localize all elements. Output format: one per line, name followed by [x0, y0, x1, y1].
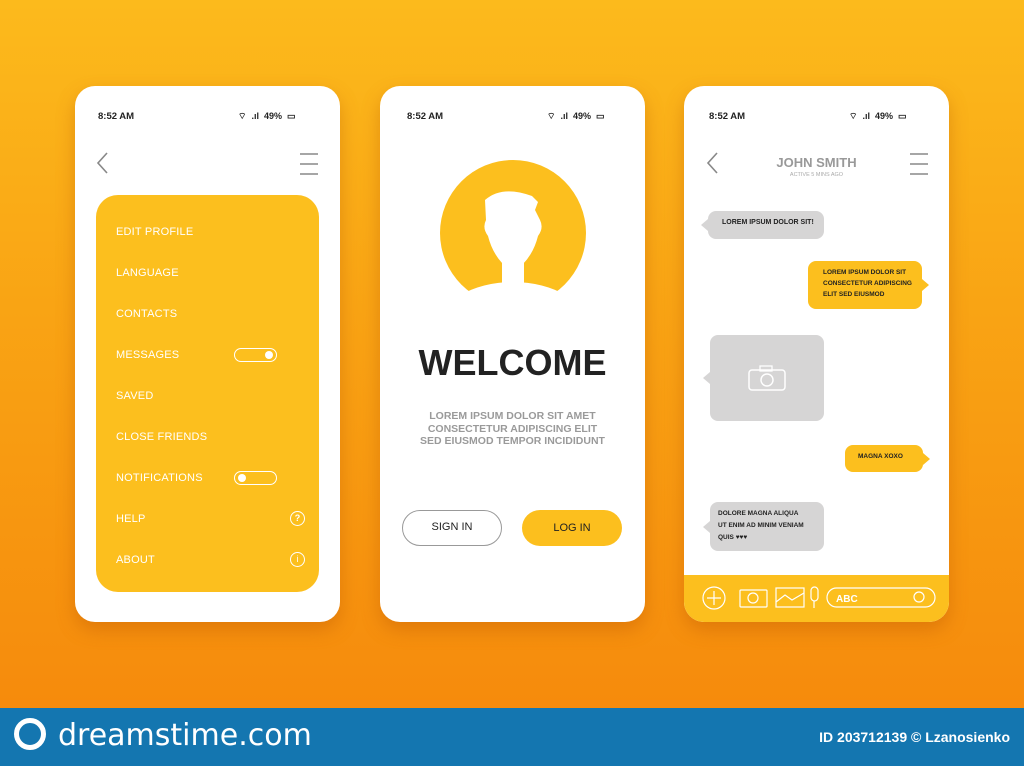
- icon: info: i: [296, 554, 298, 564]
- text block: SED EIUSMOD TEMPOR INCIDIDUNT: [420, 435, 605, 447]
- bubble: received 2: QUIS ♥♥♥: [718, 534, 747, 541]
- avatar icon: [440, 160, 586, 291]
- hamburger icon: [300, 153, 318, 175]
- bubble: sent 1: [808, 261, 922, 309]
- bubble: received 2: DOLORE MAGNA ALIQUA: [718, 510, 798, 517]
- status bar: ⌔ .ıl 49% ▭: [238, 111, 295, 121]
- menu panel: LANGUAGE: [116, 267, 179, 279]
- status bar: ⌔ .ıl 49% ▭: [849, 111, 906, 121]
- menu panel: HELP: [116, 513, 146, 525]
- menu panel: SAVED: [116, 390, 153, 402]
- phone: welcome: [380, 86, 645, 622]
- hamburger icon: [910, 153, 928, 175]
- phone: settings menu: [75, 86, 340, 622]
- toggle on: [234, 348, 277, 362]
- logo: dreamstime.com: [58, 718, 312, 753]
- button: sign in: [402, 510, 502, 546]
- status bar: 8:52 AM: [98, 111, 134, 122]
- bubble: received 2: UT ENIM AD MINIM VENIAM: [718, 522, 804, 529]
- phone: chat: [684, 86, 949, 622]
- menu panel: [96, 195, 319, 592]
- menu panel: MESSAGES: [116, 349, 179, 361]
- footer bar: [0, 708, 1024, 766]
- icon: info: [290, 552, 305, 567]
- input bar: [684, 575, 949, 622]
- bubble: sent 1: ELIT SED EIUSMOD: [823, 291, 884, 298]
- heading: welcome: WELCOME: [418, 342, 606, 383]
- status bar: [407, 111, 604, 122]
- button: log in: LOG IN: [553, 522, 591, 534]
- menu panel: CONTACTS: [116, 308, 177, 320]
- toggle off: [234, 471, 277, 485]
- back icon: [707, 152, 718, 174]
- bubble: sent 2: MAGNA XOXO: [858, 453, 903, 460]
- status bar: 8:52 AM: [709, 111, 745, 122]
- menu panel: ABOUT: [116, 554, 155, 566]
- button: sign in: SIGN IN: [432, 521, 472, 533]
- chat header: [776, 155, 857, 178]
- back icon: [97, 152, 108, 174]
- bubble: received 1: [708, 211, 824, 239]
- menu panel: EDIT PROFILE: [116, 226, 193, 238]
- bubble: received 1: LOREM IPSUM DOLOR SIT!: [722, 219, 814, 226]
- chat header: JOHN SMITH: [776, 155, 857, 170]
- menu panel: NOTIFICATIONS: [116, 472, 203, 484]
- input bar: ABC: [836, 594, 858, 605]
- bubble: sent 1: LOREM IPSUM DOLOR SIT: [823, 269, 906, 276]
- button: log in: [522, 510, 622, 546]
- status bar: [98, 111, 295, 122]
- text block: LOREM IPSUM DOLOR SIT AMET: [429, 410, 596, 422]
- text block: CONSECTETUR ADIPISCING ELIT: [428, 422, 597, 434]
- status bar: [709, 111, 906, 122]
- icon: help: ?: [295, 513, 300, 523]
- text block: [420, 410, 605, 447]
- chat header: ACTIVE 5 MINS AGO: [790, 172, 843, 178]
- bubble: sent 1: CONSECTETUR ADIPISCING: [823, 280, 912, 287]
- bubble: photo: [710, 335, 824, 421]
- status bar: ⌔ .ıl 49% ▭: [547, 111, 604, 121]
- credit text: ID 203712139 © Lzanosienko: [819, 729, 1010, 745]
- bubble: received 2: [710, 502, 824, 551]
- menu panel: CLOSE FRIENDS: [116, 431, 207, 443]
- bubble: sent 2: [845, 445, 923, 472]
- status bar: 8:52 AM: [407, 111, 443, 122]
- icon: help: [290, 511, 305, 526]
